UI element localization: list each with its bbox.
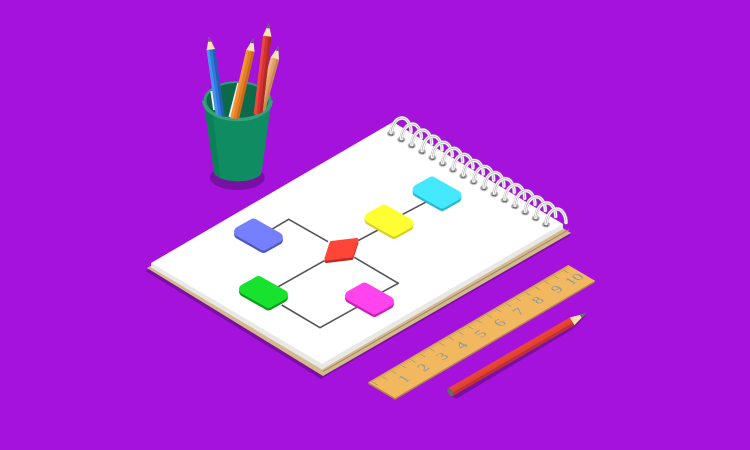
- pencil shadow: [450, 315, 587, 398]
- ruler numbers: 3: [432, 350, 453, 363]
- spiral notebook: [146, 118, 571, 379]
- ruler numbers: 9: [547, 283, 568, 295]
- page edge: [151, 224, 563, 370]
- cup body front: [204, 100, 272, 181]
- notebook shadow: [146, 130, 571, 379]
- flowchart node: red decision diamond: [326, 240, 356, 261]
- ruler numbers: 2: [413, 362, 434, 374]
- flowchart node: yellow: [370, 210, 408, 234]
- spiral binding: [387, 118, 566, 228]
- white reflections in cup: [212, 83, 238, 117]
- ruler numbers: [394, 271, 588, 385]
- ruler numbers: 6: [490, 317, 511, 329]
- ruler numbers: 4: [452, 339, 472, 351]
- ruler numbers: 8: [528, 294, 548, 307]
- ruler numbers: 7: [509, 305, 530, 318]
- ruler numbers: 10: [561, 271, 588, 287]
- red pencil: [446, 309, 588, 398]
- flowchart node: blue: [239, 224, 278, 248]
- ruler numbers: 5: [471, 328, 491, 340]
- ruler edge: [368, 281, 595, 400]
- cup rim and interior: [204, 81, 272, 120]
- flowchart connectors: [272, 202, 427, 328]
- ruler numbers: 1: [394, 373, 415, 385]
- pencil: orange: [230, 37, 257, 121]
- cup shadow: [210, 165, 265, 190]
- notebook cover: [147, 128, 571, 376]
- flowchart node: magenta: [350, 288, 389, 312]
- pen cup with pencils: [204, 23, 282, 190]
- pencil body: [446, 309, 588, 397]
- flowchart node: cyan: [418, 182, 456, 206]
- flowchart node: green: [244, 281, 283, 305]
- pencil: blue: [205, 36, 225, 119]
- wooden ruler: [368, 265, 595, 400]
- pencil: red: [254, 23, 273, 115]
- ruler face with ticks and numbers: [368, 265, 595, 398]
- white page: [151, 122, 563, 364]
- pencil: tan: [255, 45, 282, 117]
